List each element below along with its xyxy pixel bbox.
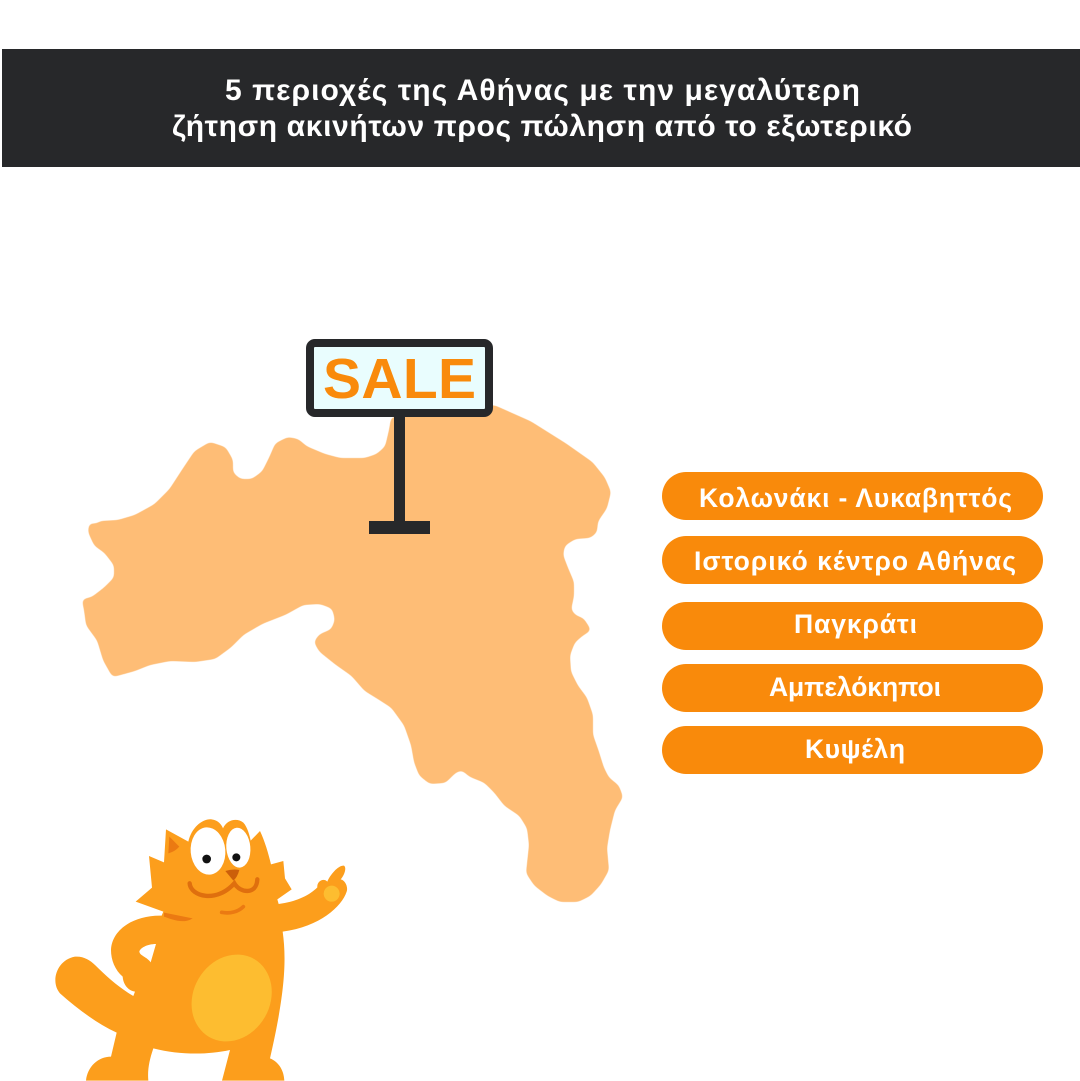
area pill: Pagkrati	[662, 602, 1043, 650]
list of areas	[662, 472, 1043, 774]
map of Attica region	[83, 406, 622, 901]
area pill: historic centre	[662, 536, 1043, 584]
area pill: Kypseli: Κυψέλη	[805, 734, 905, 764]
title banner: ζήτηση ακινήτων προς πώληση από το εξωτερικό	[172, 110, 912, 143]
area pill: Ampelokipoi	[662, 664, 1043, 712]
area pill: Ampelokipoi: Αμπελόκηποι	[769, 672, 941, 702]
title banner	[2, 49, 1080, 167]
cat mascot pointing	[55, 819, 347, 1081]
area pill: Kolonaki	[662, 472, 1043, 520]
area pill: Kypseli	[662, 726, 1043, 774]
title banner: 5 περιοχές της Αθήνας με την μεγαλύτερη	[225, 74, 860, 107]
area pill: historic centre: Ιστορικό κέντρο Αθήνας	[694, 546, 1016, 576]
sale sign	[310, 343, 489, 534]
sale sign: SALE	[323, 347, 476, 411]
area pill: Pagkrati: Παγκράτι	[794, 609, 917, 639]
area pill: Kolonaki: Κολωνάκι - Λυκαβηττός	[699, 483, 1012, 513]
